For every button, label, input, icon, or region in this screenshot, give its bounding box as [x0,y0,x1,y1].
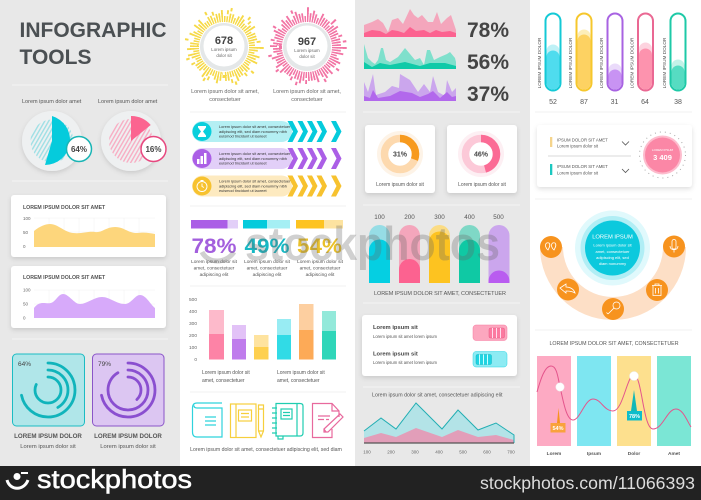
card: donut 46% [447,125,517,193]
area chart: pink 78%: 78% [467,19,509,42]
rounded column chart [369,214,510,297]
center circle: Lorem ipsum dolor sit [593,242,632,248]
percent progress: 78: Lorem ipsum dolor sit [191,259,238,265]
sunburst: 678 [186,9,262,103]
center circle: diam nonummy [599,261,626,266]
card: donut 46%: Lorem ipsum dolor sit [458,182,507,188]
callout 54%: 54% [552,426,564,432]
bar chart: Lorem ipsum dolor sit [202,370,250,376]
percent progress: 49: 49% [244,235,290,258]
percent progress: 54 [296,220,344,278]
card: yellow area chart: 50 [23,230,29,235]
gauge: 31: 31 [611,99,618,106]
counter badge 3 409 [640,132,686,178]
arrow bar: yellow: euismod tincidunt ut laoreet [219,188,267,193]
center circle [575,210,650,286]
card: purple area chart: LOREM IPSUM DOLOR SIT AMET [23,275,106,281]
arrow bar: yellow [192,176,342,196]
panel: teal radial chart: Lorem ipsum dolor sit [20,444,76,450]
card: purple area chart: 100 [23,288,31,292]
panel: teal radial chart: 64% [18,361,31,368]
line area chart: Lorem ipsum dolor sit amet, consectetuer adipiscing elit [372,392,503,398]
card: list and counter: IPSUM DOLOR SIT AMET [557,138,608,142]
percent progress: 78: amet, consectetuer [194,266,235,272]
gauge: 52: 52 [549,99,557,106]
arrow bar: teal [192,121,342,142]
sunburst: 678: dolor sit [216,53,232,58]
card: toggles: Lorem ipsum sit amet lorem ipsum [373,360,438,365]
sunburst: 678: Lorem ipsum dolor sit amet, [191,89,259,95]
arrow bar: purple: Lorem ipsum dolor sit amet, consectetuer [219,151,291,156]
icon: trash [646,279,668,301]
rounded column chart: LOREM IPSUM DOLOR SIT AMET, CONSECTETUER [374,291,506,297]
line area chart [363,392,515,454]
gauge: 31 [599,14,622,106]
sunburst: 967: consectetuer [291,97,323,103]
bar chart: 500 [189,297,197,303]
sunburst: 678: Lorem ipsum [211,47,237,52]
sunburst: 967: 967 [298,36,316,48]
footer bar [0,464,701,500]
percent progress: 78: 78% [192,235,237,258]
arrow bar: teal: Lorem ipsum dolor sit amet, consectetuer [219,124,291,129]
card: toggles: Lorem ipsum sit amet lorem ipsum [373,334,438,339]
area chart: purple 37% [364,74,509,106]
arrow bar: purple: euismod tincidunt ut laoreet [219,160,267,166]
callout 78%: 78% [629,414,640,420]
rounded column chart: 200 [404,214,415,221]
icon: microphone [663,236,685,258]
gauge: 64: 64 [641,99,649,106]
panel: pie charts: Lorem ipsum dolor amet [98,99,158,105]
radial menu [540,210,686,320]
percent progress: 49: amet, consectetuer [247,266,288,272]
card: purple area chart: 50 [23,302,29,306]
icon: bar graph [197,153,206,164]
wave bar chart: Dolor [628,451,640,457]
gauge: 64: LOREM IPSUM DOLOR [630,37,634,88]
line area chart: 600 [483,450,491,454]
percent progress: 54: amet, consectetuer [300,266,341,272]
toggle: pink [473,325,507,340]
panel: purple radial chart [92,354,164,450]
card: toggles: Lorem ipsum sit [373,325,418,331]
bar chart: 100 [189,345,197,351]
toggle: cyan [473,352,507,367]
panel: teal radial chart [12,354,84,450]
percent progress: 49 [243,220,291,278]
arrow bar: yellow: adipiscing elit, sed diam nonummy nibh [219,183,287,188]
center circle: amet, consectetuer [595,249,630,254]
area chart: pink 78% [364,9,509,42]
pie chart 16% [101,111,166,171]
card: list and counter [537,125,692,187]
arrow bar: yellow: Lorem ipsum dolor sit amet, consectetuer [219,178,291,184]
icons: books and notes [192,403,343,439]
panel: pie charts: Lorem ipsum dolor amet [22,99,82,105]
counter badge 3 409: 3 409 [653,153,672,162]
line area chart: 400 [435,450,443,454]
title [20,19,166,69]
watermark: stockphotos [245,217,500,270]
line area chart: 100 [363,450,371,454]
pie chart 16%: 16% [145,145,162,154]
card: toggles [362,315,517,376]
icon: notebook and pencil [230,404,264,438]
bar chart: amet, consectetuer [277,378,320,384]
title: TOOLS [20,46,91,69]
sunburst: 967: Lorem ipsum dolor sit amet, [273,89,341,95]
percent progress: 78 [191,220,238,278]
bar chart: Lorem ipsum dolor sit [277,370,325,376]
panel: teal radial chart: LOREM IPSUM DOLOR [14,433,82,440]
card: yellow area chart: 100 [23,216,31,221]
line area chart: 500 [459,450,467,454]
arrow bar: teal: adipiscing elit, sed diam nonummy nibh [219,129,287,134]
arrow bar: teal: euismod tincidunt ut laoreet [219,134,267,138]
card: list and counter: IPSUM DOLOR SIT AMET [557,164,608,169]
bar chart: amet, consectetuer [202,378,245,384]
icon: reply arrow [557,278,579,300]
percent progress: 49: Lorem ipsum dolor sit [244,259,291,265]
thermometer gauges [537,14,686,106]
area chart: green 56%: 56% [467,51,509,74]
sunburst: 967: Lorem ipsum [294,48,320,53]
card: purple area chart: 0 [23,316,26,320]
card: donut 31%: Lorem ipsum dolor sit [376,182,425,188]
panel: purple radial chart: 79% [98,361,111,368]
percent progress: 54: 54% [297,235,342,258]
percent progress: 49: adipiscing elit [253,272,282,278]
gauge: 52 [537,14,560,106]
icon: hourglass [198,126,206,137]
icon: stopwatch [197,180,207,192]
wave bar chart: LOREM IPSUM DOLOR SIT AMET, CONSECTETUER [549,341,679,347]
title: INFOGRAPHIC [20,19,166,42]
line area chart: 200 [387,450,395,454]
wave bar chart: Amet [668,451,680,457]
arrow bar: purple: adipiscing elit, sed diam nonummy nibh [219,156,287,161]
line area chart: 300 [411,450,419,454]
icon: book [192,403,222,437]
gauge: 87 [568,14,592,106]
bar chart [189,297,336,384]
card: yellow area chart [11,195,166,257]
card: donut 46%: 46% [474,152,489,158]
center circle: adipiscing elit, sed [596,255,629,260]
center circle: LOREM IPSUM [592,234,633,240]
pie chart 64% [22,111,92,171]
gauge: 87: 87 [580,99,588,106]
rounded column chart: 300 [434,214,445,221]
gauge: 52: LOREM IPSUM DOLOR [537,37,542,88]
sunburst: 678: 678 [215,35,233,47]
bar chart: 200 [189,333,197,339]
card: list and counter: Lorem ipsum dolor sit [557,170,599,176]
gauge: 31: LOREM IPSUM DOLOR [599,37,604,88]
icon: document and pen [312,404,343,438]
line area chart: 700 [507,450,515,454]
percent progress: 78: adipiscing elit [200,272,229,278]
percent progress: 54: Lorem ipsum dolor sit [297,259,344,265]
footer logo: stockphotos [37,464,192,494]
area chart: purple 37%: 37% [467,83,509,106]
icon: spiral notebook [272,404,303,439]
bar chart: 300 [189,321,197,327]
card: yellow area chart: LOREM IPSUM DOLOR SIT AMET [23,205,106,211]
footer bar: stockphotos.com/11066393 [480,473,695,493]
rounded column chart: 500 [493,214,504,221]
arrow bar: purple [192,148,342,169]
icon: quote [540,236,562,258]
panel: pie charts [22,99,166,171]
card: list and counter: Lorem ipsum dolor sit [557,144,599,148]
gauge: 38: LOREM IPSUM DOLOR [662,37,667,88]
wave bar chart [537,341,691,457]
sunburst: 967: dolor sit [299,54,315,59]
bar chart: 0 [194,357,197,363]
bar chart: 400 [189,309,197,315]
sunburst: 967 [269,9,345,103]
pie chart 64%: 64% [71,145,87,154]
icons caption: Lorem ipsum dolor sit amet, consectetuer adipiscing elit, sed diam [190,447,342,453]
callout 78% [627,390,642,420]
card: donut 31%: 31% [393,152,408,158]
percent progress: 54: adipiscing elit [306,272,335,278]
icon: key [602,298,624,320]
card: donut 31% [365,125,435,193]
wave bar chart: Ipsum [587,451,601,457]
panel: purple radial chart: Lorem ipsum dolor sit [100,444,156,450]
counter badge 3 409: LOREM IPSUM [652,148,673,152]
gauge: 87: LOREM IPSUM DOLOR [568,37,573,88]
wave bar chart: Lorem [547,451,561,457]
gauge: 38 [662,14,686,106]
card: yellow area chart: 0 [23,244,26,249]
gauge: 38: 38 [674,99,682,106]
card: purple area chart [11,266,166,328]
area chart: green 56% [364,44,509,74]
panel: purple radial chart: LOREM IPSUM DOLOR [94,433,162,440]
callout 54% [550,408,566,432]
card: toggles: Lorem ipsum sit [373,352,418,358]
rounded column chart: 400 [464,214,475,221]
sunburst: 678: consectetuer [209,97,241,103]
rounded column chart: 100 [374,214,385,221]
gauge: 64 [630,14,653,106]
